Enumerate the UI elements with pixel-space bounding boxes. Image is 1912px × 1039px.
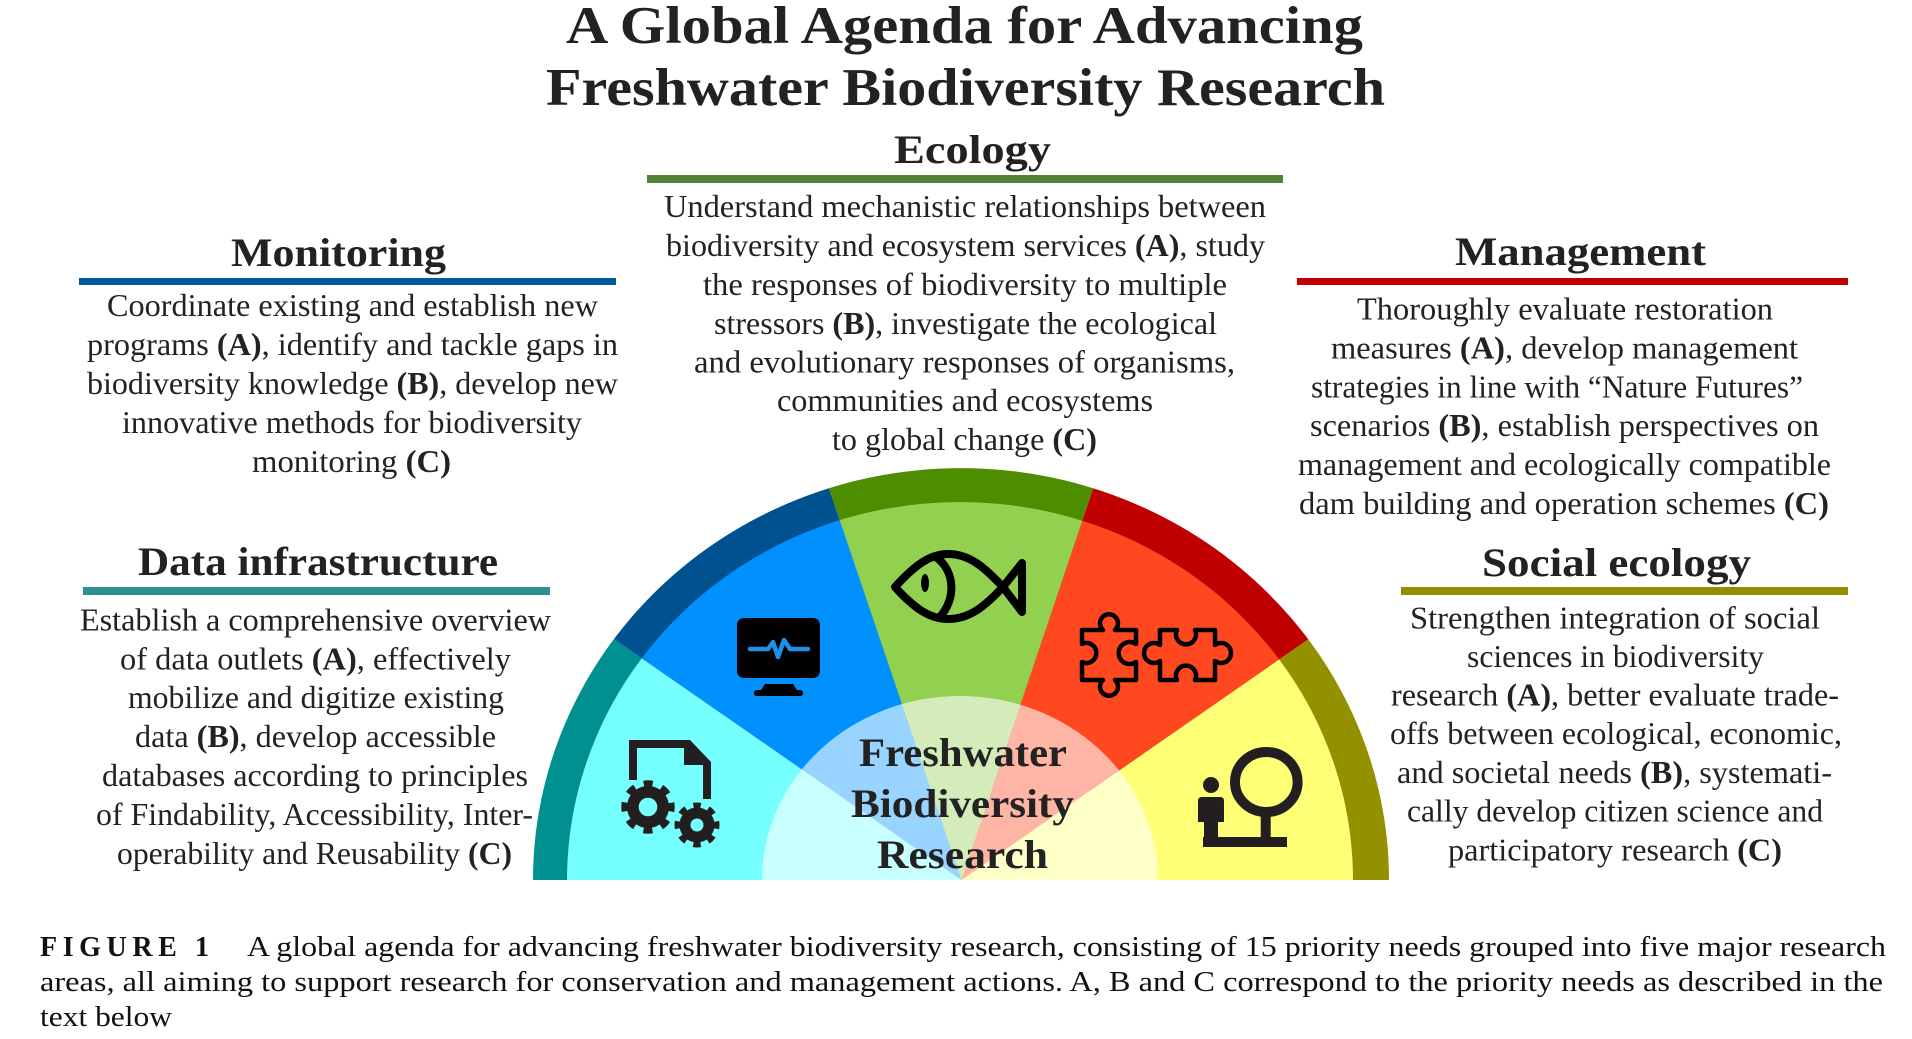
central label (851, 730, 1074, 877)
title: Freshwater Biodiversity Research (546, 59, 1385, 117)
semicircle diagram (533, 468, 1389, 880)
inner coloured segments (567, 502, 1353, 880)
text block: ecology: and evolutionary responses of organisms, (694, 344, 1235, 380)
icon: fish (895, 554, 1022, 619)
text block: social ecology: offs between ecological, economic, (1390, 715, 1842, 751)
icon: monitor with pulse (737, 618, 820, 696)
text block: monitoring: biodiversity knowledge (B), develop new (87, 365, 618, 401)
text block: ecology: biodiversity and ecosystem services (A), study (666, 227, 1265, 263)
icon: document with gears (624, 740, 717, 845)
heading bar: social ecology (1401, 587, 1848, 595)
text block: monitoring (87, 287, 618, 479)
text block: data infrastructure (80, 602, 551, 871)
text block: data infrastructure: Establish a comprehensive overview (80, 602, 551, 638)
heading: monitoring: Monitoring (231, 230, 446, 275)
text block: social ecology (1390, 600, 1842, 868)
text block: monitoring: monitoring (C) (252, 443, 451, 479)
text block: social ecology: sciences in biodiversity (1467, 638, 1764, 674)
panel: data infrastructure (80, 539, 551, 871)
central label: Freshwater (859, 730, 1067, 775)
heading bar: monitoring (79, 278, 616, 285)
panel: ecology (647, 127, 1283, 457)
text block: data infrastructure: databases according to principles (102, 757, 528, 793)
panel: monitoring (79, 230, 618, 479)
text block: monitoring: innovative methods for biodiversity (122, 404, 582, 440)
text block: data infrastructure: of data outlets (A), effectively (120, 640, 511, 676)
heading bar: ecology (647, 175, 1283, 183)
icon: puzzle pieces (1082, 614, 1231, 696)
text block: management: Thoroughly evaluate restoration (1357, 290, 1773, 326)
text block: data infrastructure: mobilize and digitize existing (128, 679, 504, 715)
heading: management: Management (1455, 229, 1707, 274)
text block: management: strategies in line with “Nature Futures” (1311, 368, 1803, 404)
panel: social ecology (1390, 540, 1848, 868)
central translucent half-ellipse (762, 696, 1158, 880)
text block: ecology: to global change (C) (832, 421, 1097, 457)
figure caption (40, 932, 1886, 1033)
heading bar: management (1297, 278, 1848, 285)
heading: data infrastructure: Data infrastructure (138, 539, 498, 584)
text block: ecology: Understand mechanistic relationships between (664, 188, 1266, 224)
text block: social ecology: research (A), better evaluate trade- (1391, 676, 1839, 712)
heading: ecology: Ecology (894, 127, 1051, 172)
text block: social ecology: and societal needs (B), systemati- (1397, 754, 1832, 790)
icon: person and tree (1198, 752, 1298, 847)
text block: social ecology: participatory research (C) (1448, 832, 1782, 868)
text block: data infrastructure: of Findability, Accessibility, Inter- (96, 796, 533, 832)
central label: Biodiversity (851, 781, 1074, 826)
figure caption: areas, all aiming to support research for conservation and management actions. A, B and C correspond to the priority needs as described in the (40, 967, 1883, 998)
text block: data infrastructure: operability and Reusability (C) (117, 835, 512, 871)
heading: social ecology: Social ecology (1482, 540, 1751, 585)
text block: monitoring: programs (A), identify and tackle gaps in (87, 326, 618, 362)
text block: management: scenarios (B), establish perspectives on (1310, 407, 1819, 443)
figure caption: A global agenda for advancing freshwater biodiversity research, consisting of 15 priority needs grouped into five major research (247, 932, 1886, 963)
text block: monitoring: Coordinate existing and establish new (107, 287, 598, 323)
figure caption: text below (40, 1002, 173, 1033)
text block: ecology: stressors (B), investigate the ecological (714, 305, 1217, 341)
panel: management (1297, 229, 1848, 521)
text block: ecology: communities and ecosystems (777, 382, 1153, 418)
text block: data infrastructure: data (B), develop accessible (135, 718, 496, 754)
central label: Research (877, 832, 1048, 877)
text block: management: measures (A), develop management (1331, 330, 1798, 366)
text block: social ecology: cally develop citizen science and (1407, 792, 1823, 828)
text block: management: dam building and operation schemes (C) (1299, 485, 1829, 521)
heading bar: data infrastructure (83, 587, 550, 595)
text block: social ecology: Strengthen integration of social (1410, 600, 1820, 636)
outer ring segments (533, 468, 1389, 880)
title (546, 0, 1385, 117)
text block: management (1298, 290, 1831, 521)
text block: ecology: the responses of biodiversity to multiple (703, 266, 1227, 302)
figure caption: FIGURE 1 (40, 932, 209, 963)
text block: management: management and ecologically compatible (1298, 446, 1831, 482)
text block: ecology (664, 188, 1266, 457)
